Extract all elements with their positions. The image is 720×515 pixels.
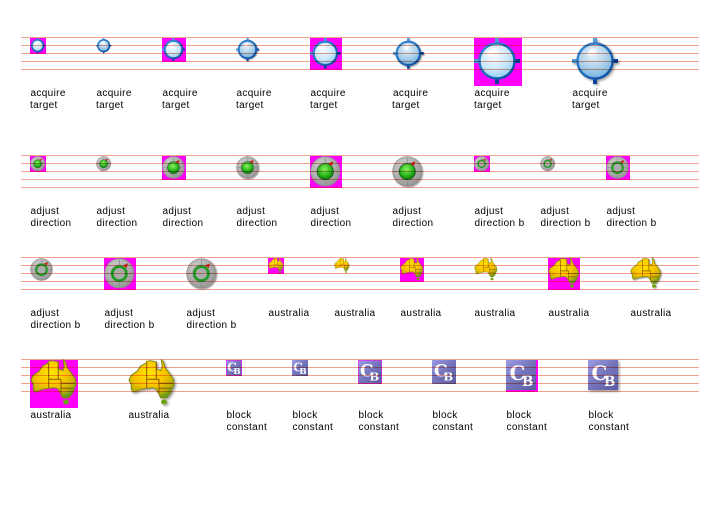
icon: acquire target 24 xyxy=(236,38,259,61)
icon: block constant 24 on magenta xyxy=(358,360,382,384)
icon: adjust direction b 24 on magenta xyxy=(606,156,630,180)
icon: block constant 32: B xyxy=(604,374,615,390)
label: acquire xyxy=(30,88,66,99)
icon: adjust direction b 32 on magenta xyxy=(104,258,136,290)
label: direction b xyxy=(30,320,81,331)
label: australia xyxy=(630,308,672,319)
label: australia xyxy=(30,410,72,421)
label: australia xyxy=(128,410,170,421)
icon: block constant 24: B xyxy=(444,370,454,384)
icon: block constant 16 xyxy=(292,360,308,377)
row: adjust direction b and australia xyxy=(30,258,672,331)
label: direction xyxy=(162,218,203,229)
label: australia xyxy=(474,308,516,319)
label: direction b xyxy=(540,218,591,229)
icon: block constant 16: C xyxy=(293,360,303,374)
label: adjust xyxy=(310,206,339,217)
label: target xyxy=(572,100,600,111)
label: target xyxy=(30,100,58,111)
label: direction b xyxy=(186,320,237,331)
icon: block constant 32 on magenta xyxy=(506,360,538,392)
icon: australia 24 xyxy=(474,258,497,280)
label: acquire xyxy=(310,88,346,99)
label: direction xyxy=(236,218,277,229)
label: block xyxy=(588,410,614,421)
label: target xyxy=(96,100,124,111)
icon: adjust direction 16 on magenta xyxy=(30,156,46,172)
label: adjust xyxy=(30,308,59,319)
icon: australia 48 on magenta xyxy=(30,360,78,408)
label: block xyxy=(432,410,458,421)
icon: block constant 32 on magenta: B xyxy=(522,374,533,390)
icon: adjust direction 24 xyxy=(236,156,258,178)
label: australia xyxy=(548,308,590,319)
icon: acquire target 16 on magenta xyxy=(30,38,46,54)
icon: block constant 24 on magenta: C xyxy=(360,362,374,382)
label: acquire xyxy=(162,88,198,99)
label: block xyxy=(292,410,318,421)
row: australia and block constant xyxy=(30,360,629,433)
icon: acquire target 24 on magenta xyxy=(162,38,186,62)
icon: australia 16 on magenta xyxy=(268,258,284,274)
icon: acquire target 48 xyxy=(572,38,618,84)
icon: block constant 24: C xyxy=(434,362,448,382)
icon: adjust direction 16 xyxy=(96,156,111,171)
icon: adjust direction 32 xyxy=(393,157,422,186)
label: adjust xyxy=(96,206,125,217)
label: constant xyxy=(432,422,473,433)
label: block xyxy=(226,410,252,421)
icon: adjust direction b 24 xyxy=(30,258,52,280)
label: acquire xyxy=(393,88,428,99)
icon: block constant 32: C xyxy=(592,361,607,385)
icon: adjust direction b 16 on magenta xyxy=(474,156,490,172)
label: direction xyxy=(30,218,71,229)
icon: block constant 16: B xyxy=(300,367,307,377)
icon: adjust direction b 16 xyxy=(540,156,555,171)
icon: acquire target 32 xyxy=(393,38,424,69)
icon: block constant 32 xyxy=(588,360,618,390)
icon: block constant 16 on magenta xyxy=(226,360,242,377)
label: adjust xyxy=(236,206,265,217)
label: adjust xyxy=(474,206,503,217)
label: acquire xyxy=(474,88,510,99)
label: direction xyxy=(392,218,433,229)
label: adjust xyxy=(186,308,215,319)
icon: australia 32 on magenta xyxy=(548,258,580,290)
label: constant xyxy=(292,422,333,433)
label: constant xyxy=(358,422,399,433)
icon: adjust direction 32 on magenta xyxy=(310,156,342,188)
icon: block constant 16 on magenta: B xyxy=(234,367,241,377)
label: adjust xyxy=(162,206,191,217)
label: adjust xyxy=(540,206,569,217)
label: direction b xyxy=(474,218,525,229)
label: constant xyxy=(506,422,547,433)
icon: block constant 24 on magenta: B xyxy=(370,370,380,384)
label: direction xyxy=(310,218,351,229)
label: target xyxy=(392,100,420,111)
icon: australia 16 xyxy=(334,258,349,273)
label: target xyxy=(310,100,338,111)
label: australia xyxy=(334,308,376,319)
label: block xyxy=(506,410,532,421)
label: adjust xyxy=(30,206,59,217)
label: target xyxy=(236,100,264,111)
icon: australia 48 xyxy=(129,360,174,404)
label: adjust xyxy=(606,206,635,217)
label: direction b xyxy=(104,320,155,331)
icon: australia 24 on magenta xyxy=(400,258,424,282)
label: direction b xyxy=(606,218,657,229)
label: australia xyxy=(400,308,442,319)
icon: adjust direction b 32 xyxy=(187,259,216,288)
icon: block constant 32 on magenta: C xyxy=(510,361,525,385)
label: block xyxy=(358,410,384,421)
label: acquire xyxy=(572,88,608,99)
icon: acquire target 48 on magenta xyxy=(474,38,522,86)
icon: acquire target 32 on magenta xyxy=(310,38,342,70)
icon: adjust direction 24 on magenta xyxy=(162,156,186,180)
label: adjust xyxy=(104,308,133,319)
label: adjust xyxy=(392,206,421,217)
icon: block constant 16 on magenta: C xyxy=(227,360,237,374)
label: target xyxy=(162,100,190,111)
label: australia xyxy=(268,308,310,319)
row: adjust direction xyxy=(30,156,657,229)
label: constant xyxy=(588,422,629,433)
label: direction xyxy=(96,218,137,229)
label: target xyxy=(474,100,502,111)
label: constant xyxy=(226,422,267,433)
row: acquire target xyxy=(30,38,618,111)
icon: block constant 24 xyxy=(432,360,456,384)
label: acquire xyxy=(96,88,132,99)
icon: australia 32 xyxy=(631,258,661,288)
icon: acquire target 16 xyxy=(96,38,111,53)
label: acquire xyxy=(236,88,272,99)
